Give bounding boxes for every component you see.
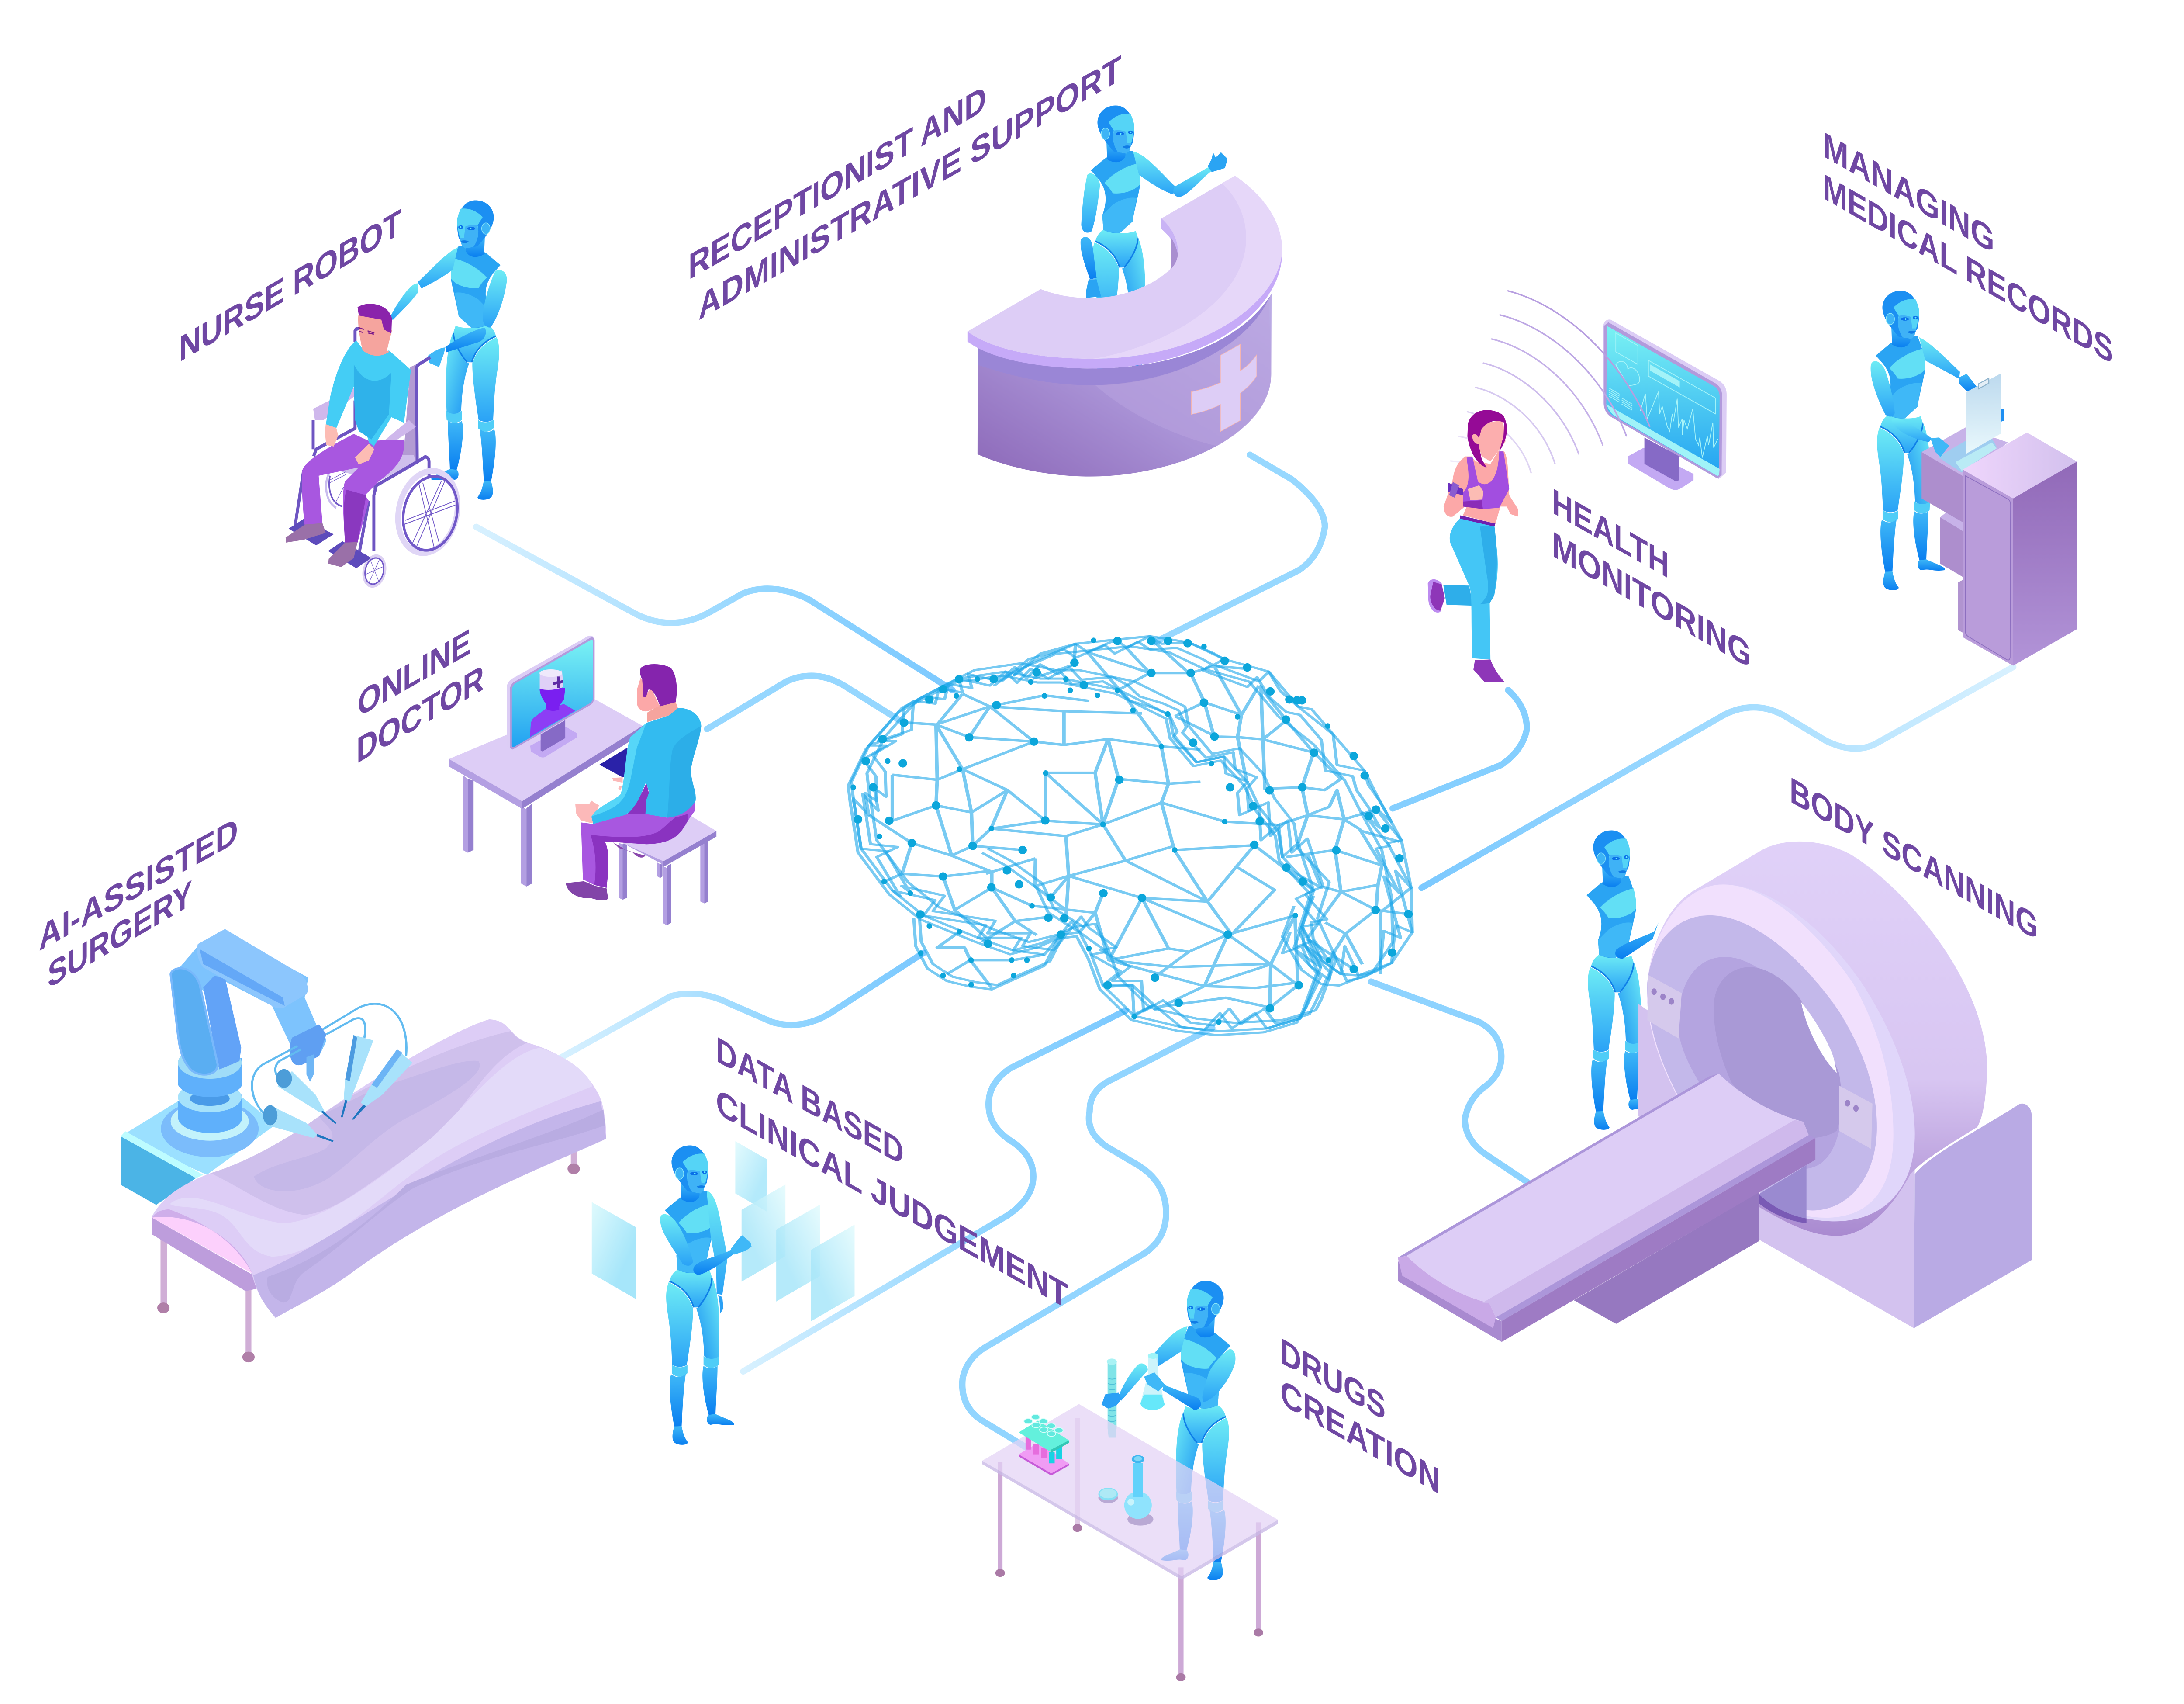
- connector lines: [476, 455, 2013, 1451]
- connector: reception: [1154, 455, 1325, 642]
- patient: [286, 304, 411, 567]
- robot receptionist arms: [1081, 152, 1227, 298]
- scanner pedestal: [1574, 1165, 1807, 1324]
- dish and flask: [1098, 1455, 1153, 1526]
- label: receptionist line 1: RECEPTIONIST AND: [688, 77, 986, 288]
- connector: medical records: [1421, 667, 2013, 888]
- brain mesh edges: [869, 640, 1411, 1016]
- desk: [449, 698, 643, 887]
- cabinet body: [1963, 433, 2077, 666]
- label: medical records: MEDICAL RECORDS: [1823, 166, 2113, 372]
- monitor: [1603, 319, 1727, 490]
- scene: medical records: [1871, 291, 2077, 666]
- scene: MRI body scanner: [1398, 831, 2032, 1342]
- floating data panels: [592, 1141, 854, 1321]
- surgical tools: [263, 1035, 412, 1142]
- robot arm base: [121, 1098, 276, 1205]
- robot doctor on screen: [530, 669, 575, 737]
- robot near arm: [1871, 361, 1949, 457]
- label: creation: CREATION: [1280, 1371, 1440, 1502]
- robot nurse: [431, 201, 501, 500]
- robot receptionist: [1091, 106, 1160, 405]
- label: health: HEALTH: [1552, 480, 1669, 586]
- connector: drugs: [962, 1028, 1212, 1451]
- draped bed: [152, 1019, 606, 1318]
- connector: online doctor: [707, 676, 902, 729]
- label: data based: DATA BASED: [716, 1029, 904, 1174]
- robot technician arm: [1615, 922, 1659, 959]
- label: monitoring: MONITORING: [1552, 523, 1751, 676]
- label: nurse robot: NURSE ROBOT: [179, 201, 401, 370]
- robot chemist: [1161, 1281, 1230, 1580]
- scene: reception desk with robot: [968, 106, 1282, 477]
- label: doctor: DOCTOR: [356, 657, 484, 772]
- label: online: ONLINE: [358, 620, 471, 725]
- robot arm: [171, 929, 326, 1133]
- filing cabinet with drawers: [1921, 427, 2008, 633]
- label: managing: MANAGING: [1823, 124, 1994, 262]
- label: drugs: DRUGS: [1280, 1330, 1386, 1428]
- document: [1966, 373, 2001, 454]
- connector: nurse robot: [476, 527, 953, 690]
- monitor with robot doctor: [507, 636, 594, 758]
- robot analyst: [665, 1146, 734, 1445]
- runner woman: [1428, 410, 1518, 682]
- brain nodes: [850, 637, 1413, 1025]
- scene: health monitoring: [1428, 291, 1727, 682]
- reception desk: [968, 176, 1282, 477]
- connector: health monitoring: [1393, 690, 1527, 808]
- robot filing arms: [1919, 337, 2004, 423]
- seated man: [566, 664, 701, 900]
- icon: medical cross: [1191, 344, 1257, 432]
- scene: online doctor: [449, 636, 716, 925]
- label: AI-assisted: AI-ASSISTED: [39, 809, 238, 959]
- label: body scanning: BODY SCANNING: [1790, 769, 2038, 948]
- brain rims: [848, 636, 1412, 1035]
- brain wireframe: [848, 636, 1413, 1035]
- stool: [619, 812, 716, 925]
- patient table: [1398, 1074, 1815, 1342]
- label: clinical judgement: CLINICAL JUDGEMENT: [716, 1081, 1068, 1317]
- robot nurse arms: [391, 247, 507, 367]
- scene: data based clinical judgement: [592, 1141, 854, 1445]
- connector: surgery: [560, 953, 924, 1058]
- side plates: [1647, 975, 1873, 1149]
- test tube rack: [1019, 1414, 1069, 1475]
- wheelchair: [289, 329, 467, 589]
- scanner base: [1638, 1004, 2032, 1328]
- signal arcs: [1451, 291, 1650, 473]
- scene: AI-assisted surgery: [121, 929, 606, 1362]
- lab table: [982, 1404, 1278, 1681]
- robot chemist arms and glassware: [1102, 1326, 1235, 1438]
- robot technician: [1586, 831, 1656, 1130]
- scanner cylinder: [1647, 842, 1987, 1236]
- label: surgery: SURGERY: [48, 872, 192, 997]
- bed legs: [157, 1150, 580, 1362]
- label: receptionist line 2: ADMINISTRATIVE SUPPORT: [698, 47, 1121, 328]
- scene: nurse robot with wheelchair patient: [286, 201, 507, 589]
- robot analyst arms: [660, 1191, 752, 1314]
- connector: body scanning: [1371, 982, 1530, 1184]
- connector: clinical judgement: [743, 1011, 1126, 1372]
- robot filing: [1876, 291, 1945, 590]
- cables: [252, 1004, 406, 1118]
- scene: drugs creation: [982, 1281, 1278, 1681]
